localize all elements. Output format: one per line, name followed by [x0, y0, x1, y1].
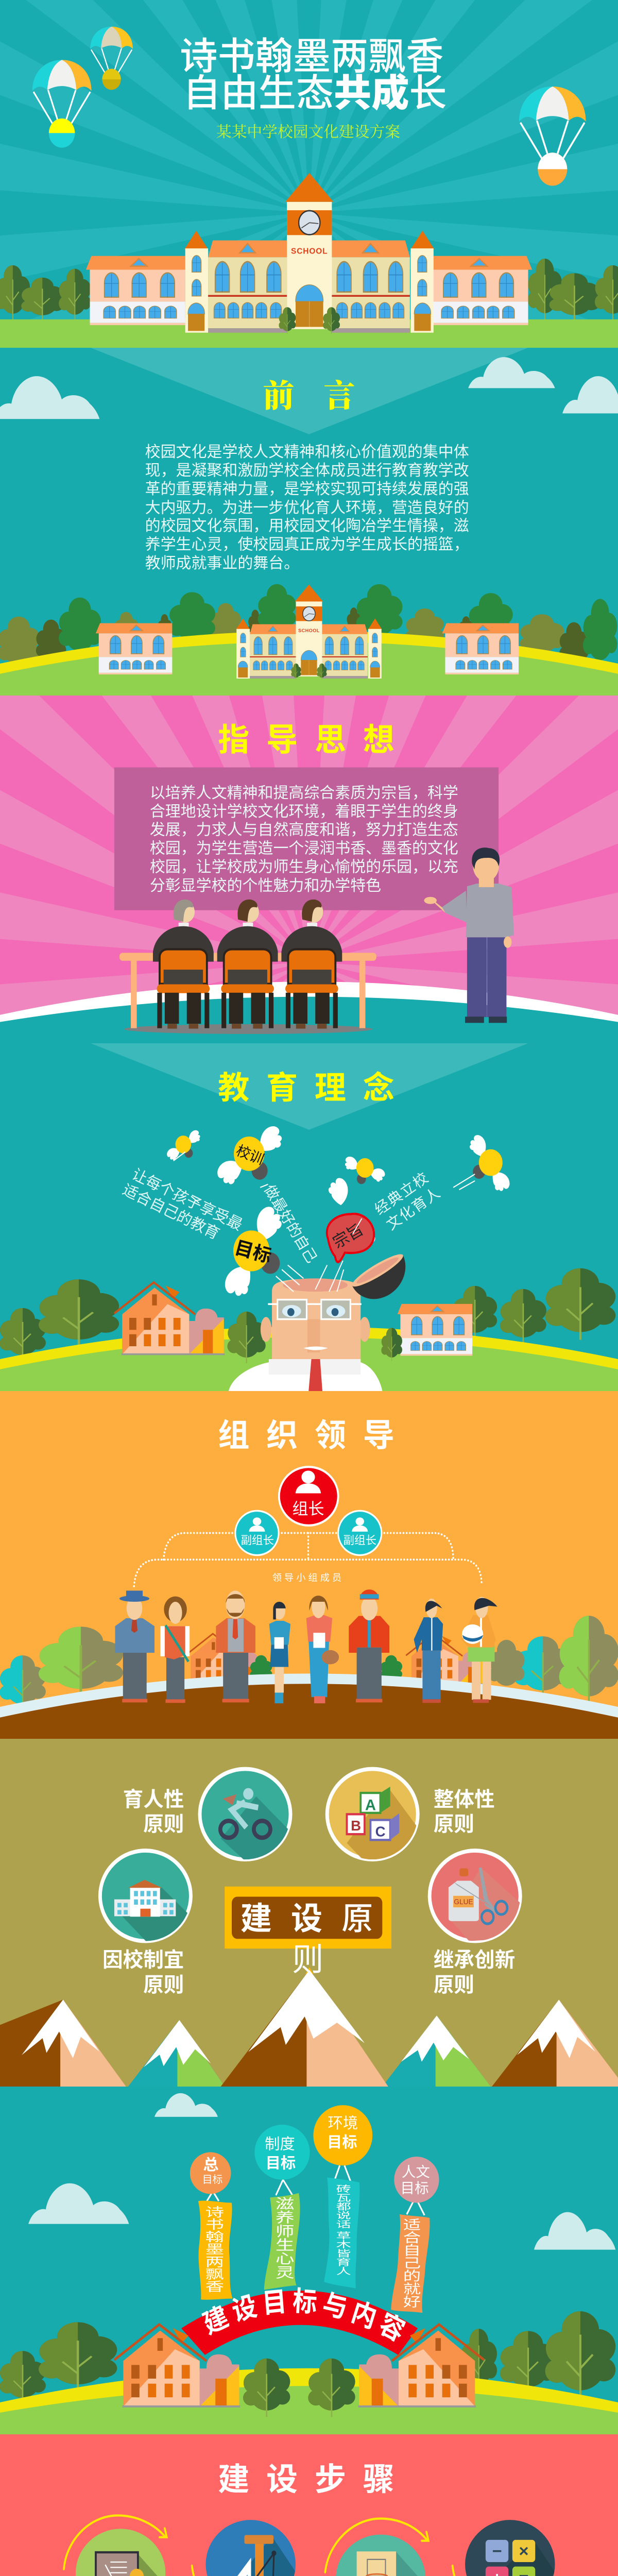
principle labels: 原则 [434, 1813, 474, 1836]
goal: humanities: 适合自己的就好 [400, 2218, 421, 2308]
badge: construction principles: 则 [292, 1942, 323, 1977]
brain with wings: 宗旨 [330, 1220, 366, 1252]
node: deputy left: 副组长 [241, 1534, 274, 1547]
goal: humanities [391, 2157, 439, 2313]
section: cover [0, 0, 618, 348]
slogan: classics: 文化育人 [384, 1184, 444, 1233]
principle labels: 因校制宜 [102, 1949, 184, 1972]
icon: glue and scissors [430, 1851, 520, 1941]
step 3 icon [336, 2535, 426, 2576]
goal: environment: 环境 [328, 2115, 358, 2132]
icon: ABC blocks [327, 1769, 418, 1859]
school building [86, 173, 532, 334]
person 8 [461, 1597, 497, 1703]
badge: construction principles [225, 1887, 392, 1977]
text panel: 合理地设计学校文化环境，着眼于学生的终身 [150, 803, 458, 820]
slogan: every child: 让每个孩子享受最 [129, 1166, 245, 1234]
house [114, 1282, 225, 1355]
icon: school building [100, 1851, 191, 1941]
title [180, 35, 447, 114]
goal: overall: 总 [203, 2156, 219, 2174]
title: 诗书翰墨两飘香 [180, 35, 443, 77]
heading: 指导思想 [218, 722, 411, 757]
node: deputy right [338, 1511, 382, 1555]
goal: humanities: 目标 [401, 2180, 429, 2196]
text panel: 校园，为学生营造一个浸润书香、墨香的文化 [150, 840, 458, 857]
body text: 养学生心灵，使校园真正成为学生成长的摇篮， [145, 536, 469, 553]
person 2 [160, 1597, 190, 1703]
section: construction principles [0, 1739, 618, 2087]
body text: 的校园文化氛围，用校园文化陶冶学生情操，滋 [145, 518, 469, 535]
goal: overall: 目标 [202, 2174, 222, 2185]
ground [0, 319, 618, 348]
step 4 icon [465, 2520, 555, 2576]
body text: 革的重要精神力量，是学校实现可持续发展的强 [145, 481, 469, 498]
node: deputy right: 副组长 [343, 1534, 376, 1547]
slogan: classics [372, 1169, 444, 1233]
hill [0, 631, 618, 696]
icon: cycling [200, 1769, 300, 1868]
teacher [424, 848, 514, 1023]
heading: 前言 [263, 379, 384, 414]
goal: system: 制度 [265, 2136, 295, 2153]
bulb label: 目标 [232, 1236, 274, 1267]
person 4 [269, 1602, 290, 1703]
red banner: 建设目标与内容 [201, 2287, 406, 2342]
goal: humanities: 人文 [402, 2164, 430, 2180]
principle labels: 继承创新 [434, 1949, 515, 1972]
hill [0, 981, 618, 1043]
classroom desk and students [119, 900, 376, 1034]
person 1 [115, 1590, 154, 1702]
step 1 icon [76, 2529, 165, 2576]
person 3 [216, 1590, 255, 1702]
text panel [114, 767, 499, 910]
section: guiding ideology [0, 696, 618, 1034]
slogan: classics: 经典立校 [372, 1169, 432, 1218]
icon: ABC blocks: B [351, 1818, 361, 1834]
goal: system [254, 2125, 310, 2290]
motion lines [174, 1152, 475, 1292]
text panel: 发展，力求人与自然高度和谐，努力打造生态 [150, 821, 458, 838]
heading: 组织领导 [218, 1418, 411, 1453]
house left [114, 2325, 240, 2408]
trees [0, 2311, 615, 2403]
body text: 大内驱力。为进一步优化育人环境，营造良好的 [145, 499, 469, 516]
body text [145, 444, 469, 572]
goal: environment: 目标 [327, 2134, 357, 2151]
goal: system: 目标 [266, 2155, 296, 2172]
icon: parachute left [32, 60, 92, 148]
school buildings [96, 585, 519, 680]
node: leader: 组长 [292, 1500, 324, 1518]
text panel: 校园，让学校成为师生身心愉悦的乐园，以充 [150, 859, 458, 876]
text panel: 以培养人文精神和提高综合素质为宗旨，科学 [150, 785, 458, 802]
goal: environment [313, 2105, 372, 2289]
principle labels: 原则 [434, 1974, 474, 1996]
background trees and houses [0, 1616, 618, 1710]
trees [0, 259, 618, 320]
node: leader [279, 1467, 338, 1526]
house right [358, 2325, 484, 2408]
trees [0, 1268, 615, 1361]
icon: glue and scissors: GLUE [454, 1898, 473, 1906]
small trees [228, 1312, 402, 1363]
section: organisation leadership [0, 1391, 618, 1739]
person 7 [414, 1599, 443, 1703]
step 4 icon: × [519, 2541, 529, 2561]
text panel: 分彰显学校的个性魅力和办学特色 [150, 877, 381, 894]
forest [0, 584, 617, 665]
icon: parachute small [90, 27, 133, 90]
principle labels: 整体性 [434, 1788, 495, 1811]
flying bulbs [163, 1116, 517, 1311]
icon: parachute right [519, 87, 586, 186]
hill [0, 1673, 618, 1739]
open-head man [229, 1250, 415, 1391]
clouds [28, 2093, 615, 2250]
person 6 [349, 1589, 389, 1702]
step 4 icon: − [492, 2541, 502, 2561]
heading: 建设步骤 [218, 2462, 411, 2497]
org connector lines [134, 1533, 482, 1586]
person 5 [306, 1596, 339, 1703]
title: 自由生态共成长 [183, 72, 447, 114]
section: educational philosophy [0, 1043, 618, 1391]
badge: construction principles: 建设原 [241, 1901, 392, 1936]
step arrows [64, 2516, 556, 2576]
body text: 现，是凝聚和激励学校全体成员进行教育教学改 [145, 462, 469, 479]
section: goals and content [0, 2093, 618, 2434]
label: 领导小组成员 [272, 1572, 344, 1583]
step 2 icon [205, 2520, 296, 2576]
subtitle: 某某中学校园文化建设方案 [216, 124, 400, 141]
body text: 校园文化是学校人文精神和核心价值观的集中体 [145, 444, 469, 461]
mountains [0, 1967, 618, 2087]
centre trees [243, 2359, 355, 2417]
principle labels: 原则 [143, 1974, 184, 1996]
node: deputy left [235, 1511, 279, 1555]
body text: 教师成就事业的舞台。 [145, 555, 299, 572]
goal: environment: 砖瓦都说话 草木皆育人 [333, 2184, 351, 2275]
section: construction steps [0, 2434, 618, 2576]
icon: ABC blocks: A [365, 1798, 376, 1814]
section: foreword [0, 348, 618, 696]
principle labels: 原则 [143, 1813, 184, 1836]
hill [0, 2368, 618, 2434]
school wing [398, 1304, 472, 1355]
heading: 教育理念 [218, 1071, 411, 1106]
principle labels [102, 1788, 515, 1996]
goal: overall: 诗书翰墨两飘香 [202, 2206, 224, 2293]
slogan: best self: 做最好的自己 [261, 1182, 320, 1266]
goal: overall [190, 2152, 233, 2300]
goal: system: 滋养师生心灵 [273, 2197, 295, 2279]
bulb label: 校训 [234, 1142, 266, 1167]
slogan: every child: 适合自己的教育 [120, 1181, 222, 1243]
brain with wings [326, 1176, 379, 1262]
hill [0, 1327, 618, 1391]
principle labels: 育人性 [123, 1788, 184, 1811]
clouds [0, 357, 618, 419]
icon: ABC blocks: C [375, 1823, 386, 1839]
